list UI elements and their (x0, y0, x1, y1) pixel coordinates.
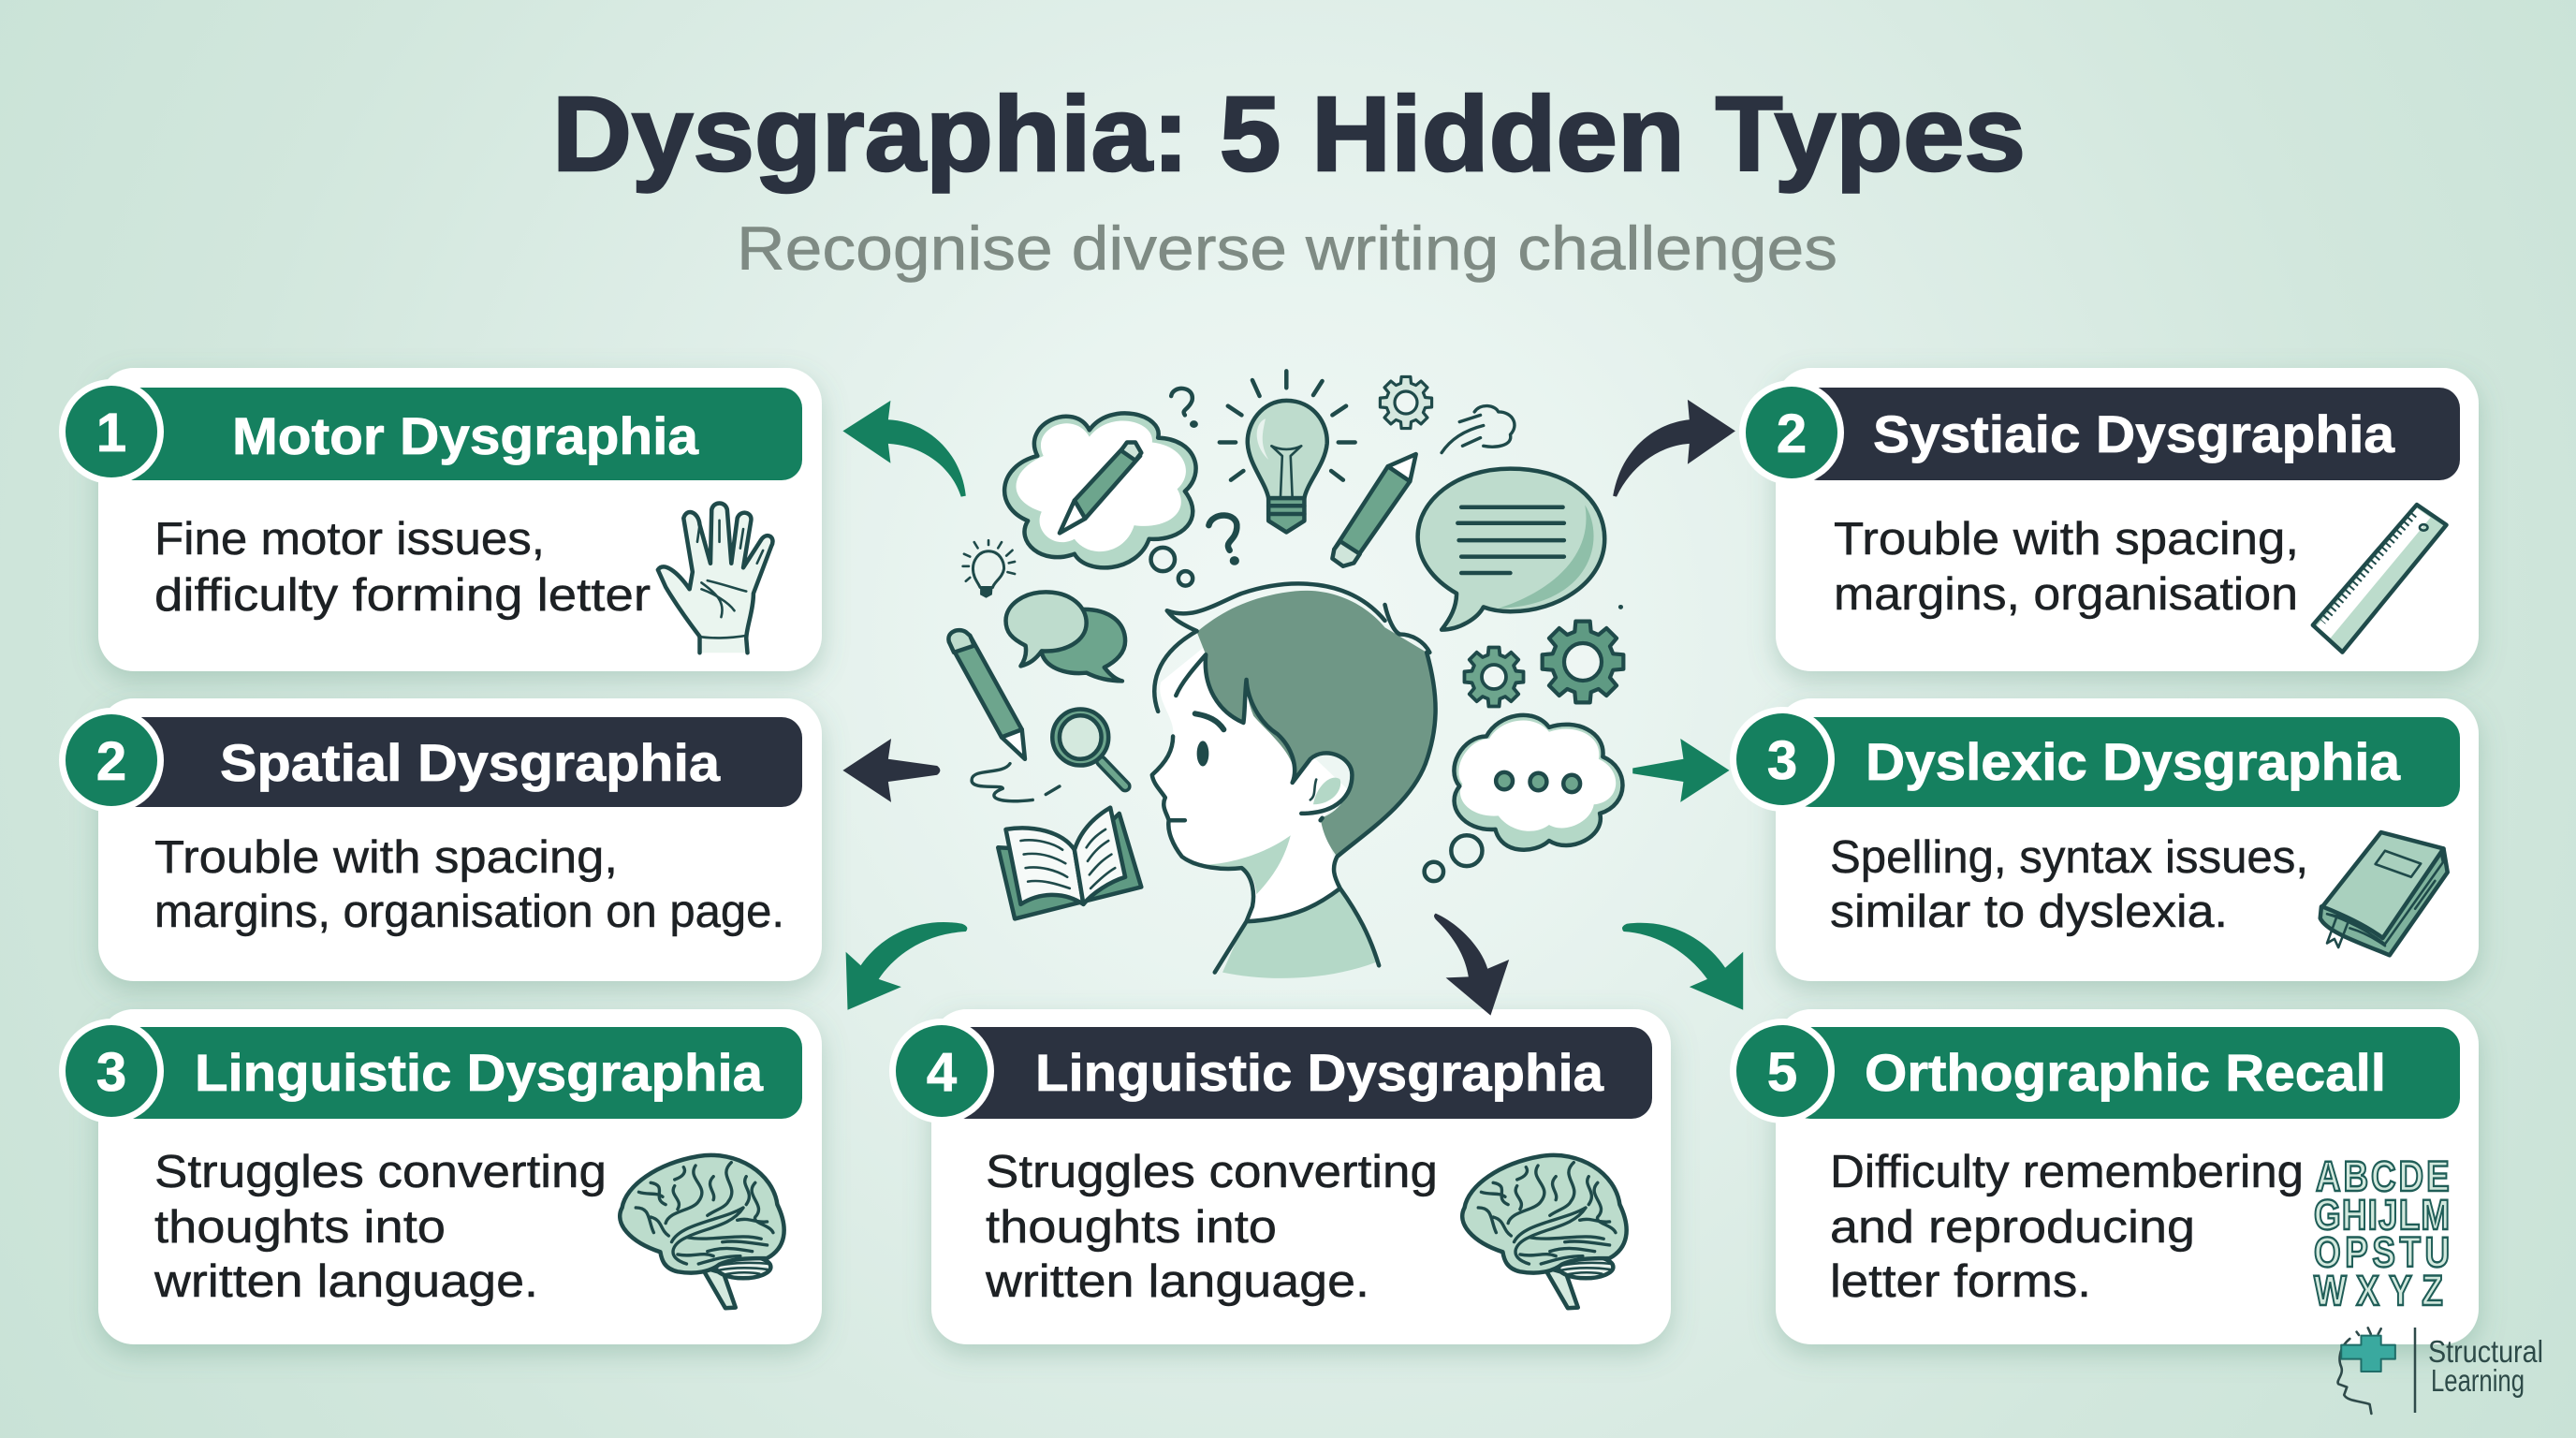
description (985, 1147, 1438, 1307)
left pencil (948, 630, 1025, 759)
magnifying glass (1052, 709, 1125, 786)
number badge: 2 (1777, 404, 1807, 464)
heading: Linguistic Dysgraphia (195, 1043, 764, 1102)
heading: Dyslexic Dysgraphia (1866, 732, 2401, 791)
arrow: to linguistic left (846, 922, 967, 1010)
logo icon (2338, 1328, 2395, 1414)
number badge (1730, 707, 1835, 812)
icon: alphabet letters: OPSTU (2314, 1229, 2450, 1276)
lightbulb (1220, 371, 1355, 532)
header bar (112, 717, 802, 807)
green pencil (1332, 454, 1416, 566)
panel: dyslexic dysgraphia (1730, 698, 2479, 981)
logo text: Structural (2428, 1334, 2543, 1369)
gear: small (1464, 647, 1524, 707)
description: letter forms. (1830, 1256, 2091, 1307)
header bar (1797, 388, 2460, 480)
panel: orthographic recall (1730, 1009, 2479, 1344)
icon: alphabet letters: ABCDE (2316, 1153, 2450, 1200)
logo divider (2414, 1328, 2416, 1413)
heading: Systiaic Dysgraphia (1873, 404, 2395, 463)
description (1830, 1147, 2304, 1307)
question mark small (1171, 389, 1198, 428)
number badge (59, 379, 164, 484)
header bar (945, 1027, 1652, 1119)
logo text (2428, 1334, 2543, 1398)
description: margins, organisation (1834, 569, 2298, 620)
description (154, 832, 784, 937)
panel: linguistic dysgraphia left (59, 1009, 822, 1344)
description (154, 514, 651, 621)
icon: alphabet letters: WXYZ (2314, 1268, 2443, 1314)
header bar (112, 1027, 802, 1119)
subtitle: Recognise diverse writing challenges (737, 213, 1837, 283)
description: Spelling, syntax issues, (1830, 832, 2308, 883)
description: difficulty forming letter (154, 570, 651, 621)
heading: Spatial Dysgraphia (220, 733, 721, 792)
icon: alphabet letters (2314, 1153, 2450, 1314)
logo text: Learning (2431, 1363, 2525, 1398)
number badge (59, 708, 164, 813)
arrow: to spatial (842, 739, 940, 802)
number badge: 2 (96, 731, 126, 792)
arrow: to linguistic centre (1434, 914, 1509, 1016)
thought bubbles (1151, 548, 1193, 586)
gear: top (1380, 376, 1432, 429)
arrow: to systiaic (1613, 400, 1735, 497)
panel: spatial dysgraphia (59, 698, 822, 981)
description: margins, organisation on page. (154, 887, 784, 937)
speech bubble (1418, 469, 1604, 630)
number badge (889, 1019, 994, 1123)
description (1830, 832, 2308, 937)
description: Struggles converting (154, 1147, 607, 1197)
icon: ruler (2313, 505, 2447, 653)
gear: large (1543, 622, 1623, 702)
description: and reproducing (1830, 1202, 2195, 1253)
icon: brain (620, 1155, 784, 1308)
title: Dysgraphia: 5 Hidden Types (552, 75, 2026, 193)
question mark large (1208, 516, 1239, 565)
description: similar to dyslexia. (1830, 887, 2228, 937)
panel: linguistic dysgraphia centre (889, 1009, 1671, 1344)
number badge (59, 1019, 164, 1123)
description (1834, 514, 2299, 620)
description: Trouble with spacing, (154, 832, 618, 883)
number badge: 3 (1767, 730, 1797, 791)
boy (1152, 583, 1436, 978)
heading: Orthographic Recall (1865, 1043, 2386, 1102)
thought cloud with pencil (1004, 413, 1196, 567)
description: Difficulty remembering (1830, 1147, 2304, 1197)
number badge: 4 (927, 1042, 957, 1103)
icon: alphabet letters: GHIJLM (2314, 1192, 2450, 1239)
central illustration (842, 371, 1743, 1016)
description: thoughts into (154, 1202, 446, 1253)
arrows and figures (842, 371, 1743, 1016)
arrow: to dyslexic (1632, 739, 1730, 802)
number badge: 5 (1767, 1042, 1797, 1103)
icon: brain (1462, 1155, 1627, 1308)
number badge: 1 (96, 403, 126, 463)
heading: Linguistic Dysgraphia (1035, 1043, 1604, 1102)
dot (1618, 605, 1623, 609)
number badge: 3 (96, 1042, 126, 1103)
description: Struggles converting (986, 1147, 1438, 1197)
panel: motor dysgraphia (59, 368, 822, 671)
puff cloud (1442, 406, 1515, 453)
description (154, 1147, 607, 1307)
arrow: to orthographic (1622, 923, 1743, 1010)
squiggle (972, 764, 1060, 801)
panel: systiaic dysgraphia (1739, 368, 2479, 671)
heading: Motor Dysgraphia (232, 406, 699, 465)
arrow: to motor (842, 401, 966, 497)
description: written language. (154, 1256, 538, 1307)
icon: hand (658, 503, 772, 653)
ellipsis thought cloud (1425, 715, 1622, 881)
description: Fine motor issues, (154, 514, 545, 565)
description: thoughts into (986, 1202, 1277, 1253)
header bar (1790, 717, 2460, 807)
logo: structural learning (2338, 1328, 2543, 1414)
open book (998, 808, 1141, 918)
chat bubbles (1006, 592, 1125, 681)
header bar (1790, 1027, 2460, 1119)
small lightbulb (963, 540, 1015, 598)
header bar (112, 388, 802, 480)
number badge (1739, 380, 1844, 485)
icon: book (2320, 832, 2448, 955)
description: written language. (985, 1256, 1369, 1307)
description: Trouble with spacing, (1834, 514, 2299, 565)
number badge (1730, 1019, 1835, 1123)
